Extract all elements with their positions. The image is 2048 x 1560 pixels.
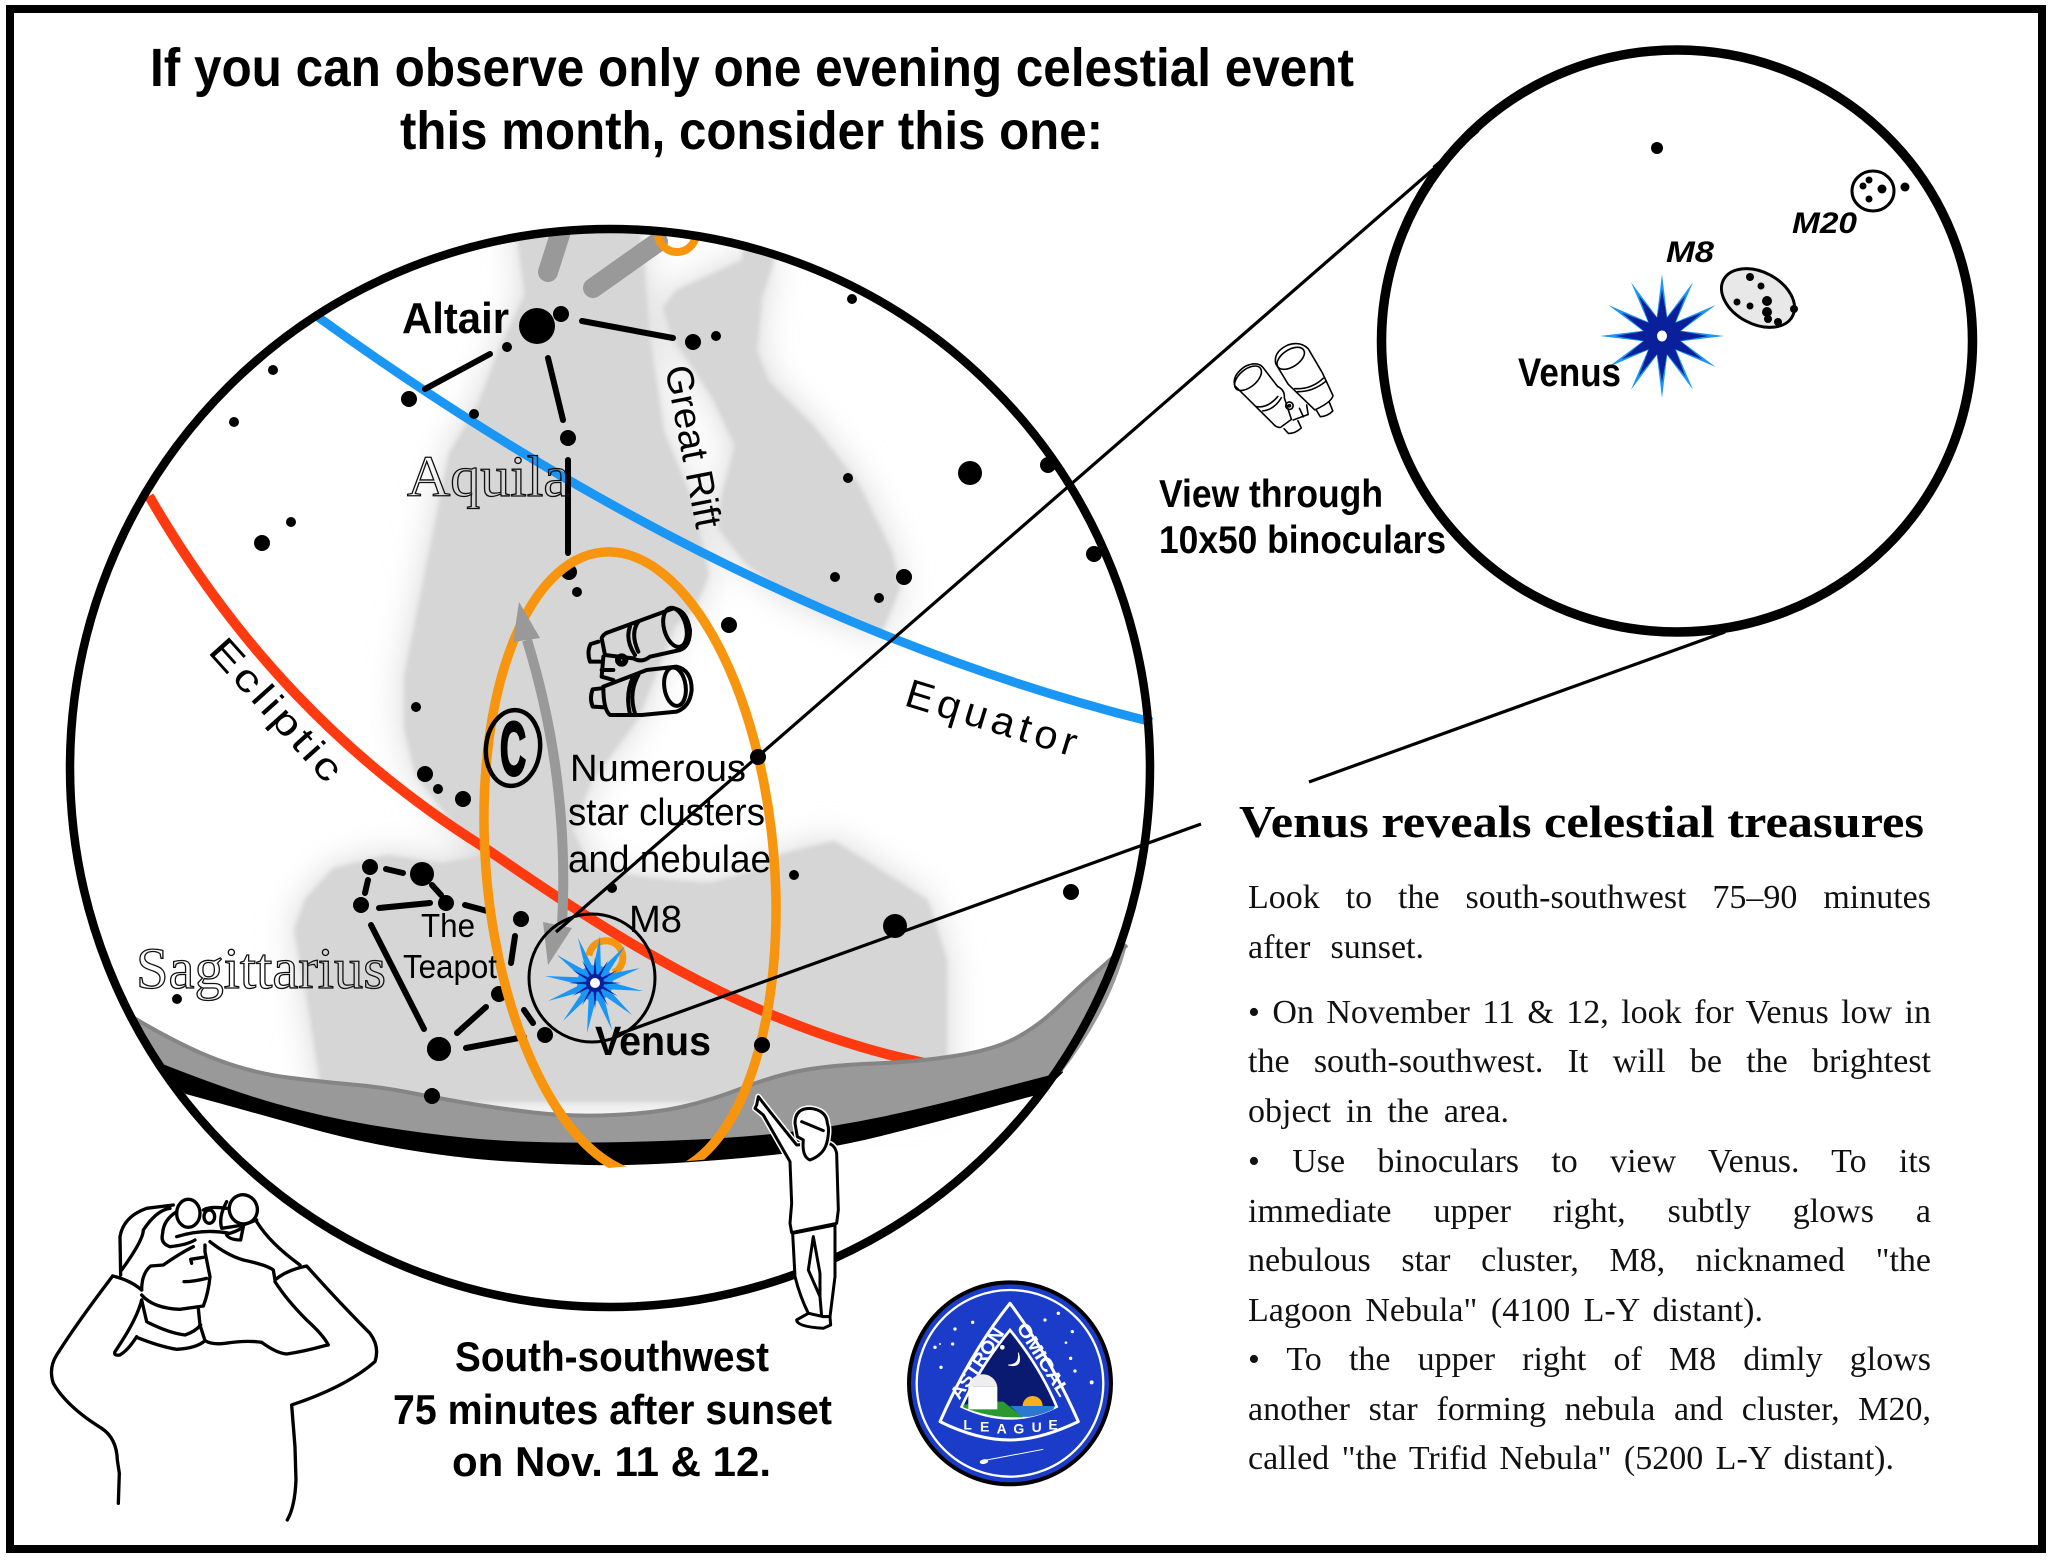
article body text: • To the upper right of M8 dimly glows — [1248, 1341, 1931, 1378]
view labels: M20 — [1792, 207, 1857, 240]
celestial equator curve — [318, 317, 1152, 722]
sky labels: Sagittarius — [136, 936, 386, 1001]
panel: binocular view circle — [1382, 50, 1972, 632]
milky way and great rift shading — [296, 225, 945, 1100]
M8 nebula — [1711, 257, 1805, 339]
view labels: M8 — [1666, 236, 1714, 269]
observer with binoculars — [51, 1191, 377, 1520]
logo: Astronomical League — [909, 1282, 1111, 1484]
icon: Venus star large — [1600, 274, 1724, 398]
article body text: called "the Trifid Nebula" (5200 L-Y distant). — [1248, 1440, 1894, 1477]
logo: Astronomical League: OMICAL — [1013, 1319, 1074, 1400]
telescope pointer bars and finder ring — [548, 214, 696, 288]
Venus field circle — [529, 914, 655, 1042]
icon: binoculars in sky — [588, 605, 692, 715]
title — [150, 38, 1354, 161]
sky labels: Venus — [595, 1018, 711, 1064]
article body text: • Use binoculars to view Venus. To its — [1248, 1143, 1931, 1180]
view labels — [1518, 207, 1857, 395]
icon: C badge — [482, 707, 544, 791]
M20 cluster — [1852, 171, 1910, 211]
article body text: • On November 11 & 12, look for Venus low in — [1248, 994, 1931, 1031]
pointer line end on circle — [1434, 130, 1478, 168]
pointer lines to binocular view — [556, 132, 1725, 1035]
article body text: the south-southwest. It will be the brightest — [1248, 1043, 1931, 1080]
viewing time caption: South-southwest — [455, 1333, 769, 1380]
orange binocular field ellipse — [479, 547, 781, 1168]
icon: Venus star in sky — [545, 936, 643, 1033]
stars over the horizon — [424, 1037, 451, 1104]
viewing time caption: on Nov. 11 & 12. — [452, 1438, 771, 1485]
title: If you can observe only one evening celestial event — [150, 38, 1354, 98]
grey motion arrow — [513, 602, 572, 965]
article heading: Venus reveals celestial treasures — [1239, 796, 1924, 847]
article body text: another star forming nebula and cluster, M20, — [1248, 1391, 1931, 1428]
viewing time caption — [393, 1333, 832, 1485]
binocular view caption: View through — [1159, 473, 1383, 516]
sky labels: Aquila — [407, 444, 570, 509]
sky labels: M8 — [629, 899, 682, 941]
logo: Astronomical League: LEAGUE — [963, 1416, 1058, 1437]
dome outline — [70, 229, 1150, 1307]
viewing time caption: 75 minutes after sunset — [393, 1386, 832, 1433]
binocular view caption: 10x50 binoculars — [1159, 519, 1446, 562]
sky labels: Altair — [402, 294, 509, 343]
view circle outline — [1382, 50, 1972, 632]
background stars — [172, 294, 1102, 1061]
binocular view caption — [1159, 473, 1446, 562]
ground and horizon — [134, 945, 1127, 1164]
article body text: object in the area. — [1248, 1093, 1509, 1130]
sky labels: Ecliptic — [200, 630, 353, 793]
sky labels: The — [421, 907, 475, 944]
constellation lines — [365, 321, 673, 1048]
title: this month, consider this one: — [400, 101, 1103, 161]
observer pointing — [755, 1097, 838, 1328]
article body text: immediate upper right, subtly glows a — [1248, 1193, 1931, 1230]
ecliptic curve — [149, 496, 925, 1063]
view labels: Venus — [1518, 351, 1621, 395]
sky labels — [136, 294, 1087, 1064]
sky labels: Equator — [900, 672, 1087, 767]
sky labels: star clusters — [568, 792, 765, 834]
sky labels: Teapot — [403, 948, 497, 985]
M8 small ring — [587, 934, 629, 974]
sky labels: Great Rift — [656, 362, 729, 532]
sky labels: and nebulae — [568, 839, 771, 881]
icon: binoculars beside view — [1226, 337, 1340, 448]
icon: C badge: C — [500, 707, 526, 791]
field star — [1651, 142, 1663, 154]
panel: sky dome — [70, 214, 1152, 1307]
article body text: Look to the south-southwest 75–90 minutes — [1248, 879, 1931, 916]
article body text: Lagoon Nebula" (4100 L-Y distant). — [1248, 1292, 1763, 1329]
logo: Astronomical League: ASTRON — [946, 1324, 1008, 1403]
article body text: nebulous star cluster, M8, nicknamed "the — [1248, 1242, 1931, 1279]
sky labels: Numerous — [570, 748, 746, 790]
stars on the orange ellipse — [537, 749, 770, 1053]
article body text: after sunset. — [1248, 929, 1424, 966]
